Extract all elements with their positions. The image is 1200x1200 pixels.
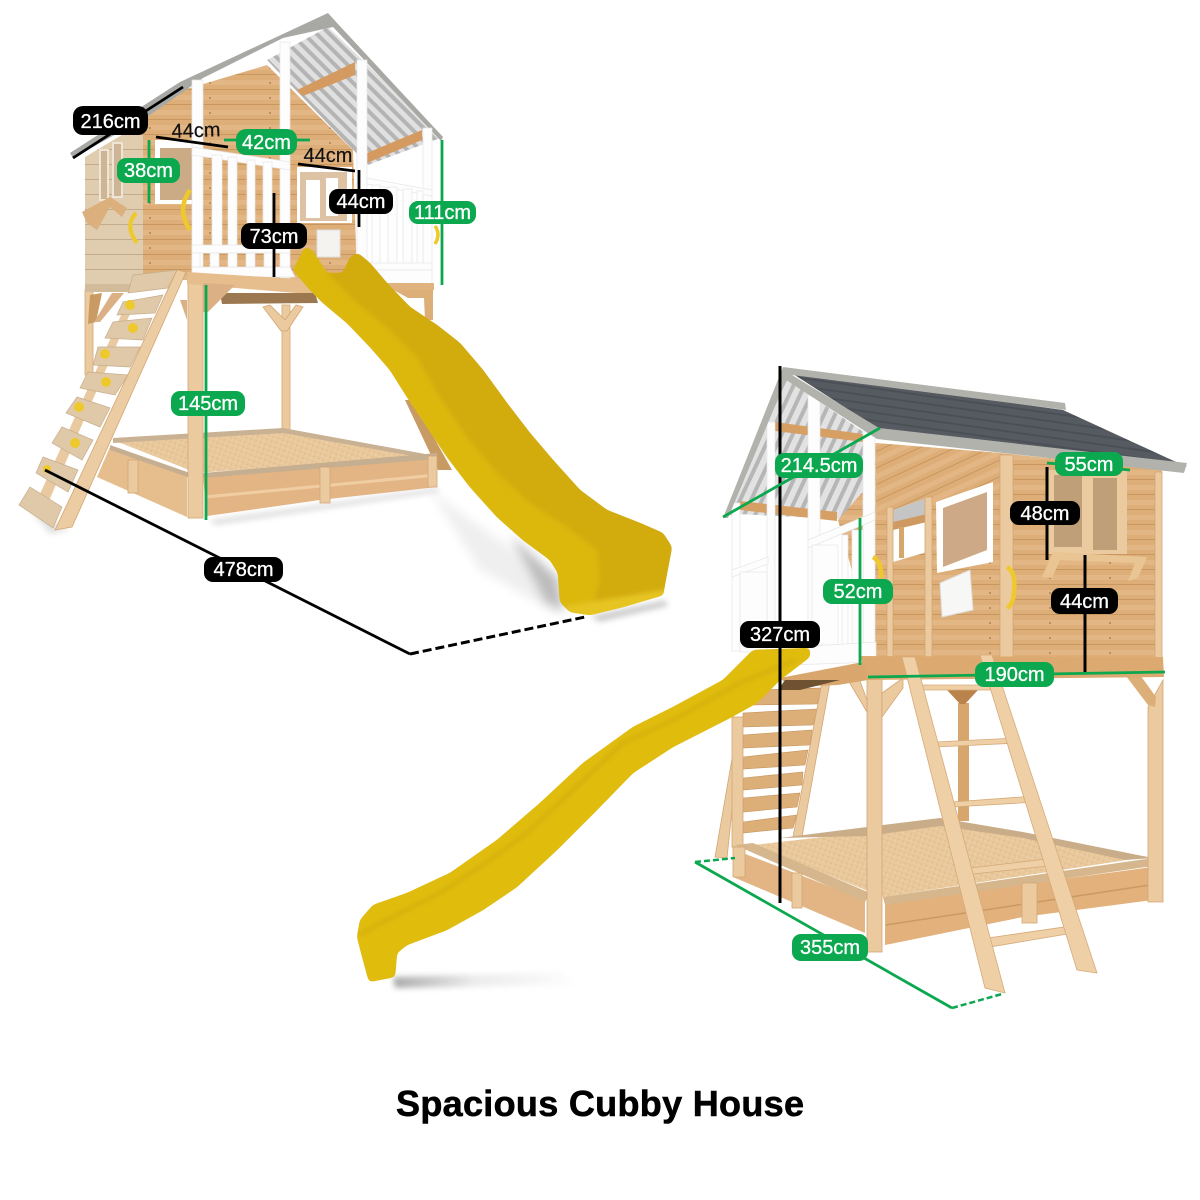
label: 44cm top left: 44cm bbox=[171, 119, 221, 143]
right ladder bbox=[902, 655, 1097, 993]
left sandpit bbox=[97, 428, 437, 517]
label: 190cm bbox=[975, 662, 1054, 687]
left balcony rail bbox=[192, 42, 432, 284]
left side handle bbox=[130, 213, 137, 243]
label: 216cm: 216cm bbox=[80, 111, 141, 133]
right window large bbox=[936, 482, 993, 573]
left window one bbox=[155, 140, 193, 204]
left window box bbox=[82, 197, 127, 230]
label: 48cm: 48cm bbox=[1021, 503, 1069, 525]
right balcony handle bbox=[873, 557, 881, 578]
left side wall bbox=[85, 120, 147, 288]
right door handle bbox=[1007, 567, 1014, 608]
left window two bbox=[297, 167, 352, 223]
right letterbox bbox=[940, 570, 973, 617]
left roof rafters bbox=[297, 62, 422, 163]
left deck beam bbox=[85, 272, 434, 320]
left front post bbox=[188, 283, 203, 518]
label: 38cm bbox=[117, 158, 180, 183]
left yellow slide bbox=[293, 247, 672, 615]
left rear stilts bbox=[85, 288, 452, 470]
dimension lines left bbox=[45, 87, 585, 654]
label: 111cm: 111cm bbox=[414, 202, 471, 224]
left climbing wall bbox=[19, 270, 186, 530]
label: 44cm top middle: 44cm bbox=[304, 145, 352, 167]
right sandpit bbox=[733, 818, 1153, 945]
right yellow slide bbox=[357, 648, 810, 982]
label: 42cm bbox=[236, 129, 297, 155]
dimension lines right bbox=[695, 366, 1165, 1008]
label: 44cm sill bbox=[1051, 588, 1118, 614]
title: Spacious Cubby House bbox=[396, 1083, 804, 1124]
right cubby house bbox=[357, 367, 1187, 993]
label: 52cm: 52cm bbox=[834, 581, 882, 603]
right slide shadow bbox=[393, 972, 575, 988]
label: 48cm bbox=[1010, 501, 1080, 525]
left front wall bbox=[143, 65, 357, 280]
label: 355cm bbox=[792, 934, 868, 961]
label: 44cm window bbox=[329, 189, 393, 214]
left side windows bbox=[100, 143, 122, 200]
label: 44cm window: 44cm bbox=[337, 191, 385, 213]
label: 190cm: 190cm bbox=[984, 664, 1045, 686]
label: 38cm: 38cm bbox=[124, 160, 173, 182]
left ground shadows bbox=[30, 488, 668, 622]
right roof underside bbox=[728, 378, 868, 520]
label: 73cm bbox=[241, 223, 307, 249]
label: 216cm bbox=[73, 106, 148, 135]
right rafters bbox=[740, 422, 863, 521]
label: 327cm bbox=[740, 621, 820, 648]
left roof underside bbox=[267, 27, 443, 165]
right gable planks bbox=[876, 443, 1000, 515]
label: 55cm: 55cm bbox=[1065, 454, 1113, 476]
right roof trim bbox=[723, 367, 1187, 518]
left cubby house bbox=[19, 13, 672, 622]
right wood walls bbox=[838, 443, 1162, 665]
left door handle bbox=[183, 190, 190, 230]
right opening bbox=[893, 498, 927, 562]
label: 44cm sill: 44cm bbox=[1060, 591, 1109, 613]
label: 145cm: 145cm bbox=[178, 393, 238, 415]
right stilts bbox=[845, 672, 1163, 952]
label: 478cm: 478cm bbox=[213, 559, 274, 581]
right side window bbox=[1047, 470, 1127, 554]
left balcony handle bbox=[435, 226, 438, 244]
right climbing frame bbox=[715, 682, 978, 858]
label: 478cm bbox=[204, 557, 283, 582]
label: 214.5cm: 214.5cm bbox=[781, 455, 857, 477]
label: 355cm: 355cm bbox=[800, 937, 860, 959]
label: 73cm: 73cm bbox=[250, 226, 298, 248]
label: 327cm: 327cm bbox=[750, 624, 810, 646]
label: 55cm bbox=[1055, 452, 1123, 476]
right roof dark bbox=[790, 372, 1187, 467]
right deck bbox=[778, 656, 1164, 690]
right balcony bbox=[732, 395, 876, 665]
label: 52cm bbox=[823, 579, 893, 604]
right door posts bbox=[887, 455, 1162, 665]
left roof edge bbox=[70, 13, 443, 158]
label: 42cm: 42cm bbox=[242, 132, 291, 154]
right window box bbox=[1042, 552, 1147, 581]
left letterbox bbox=[317, 230, 340, 257]
